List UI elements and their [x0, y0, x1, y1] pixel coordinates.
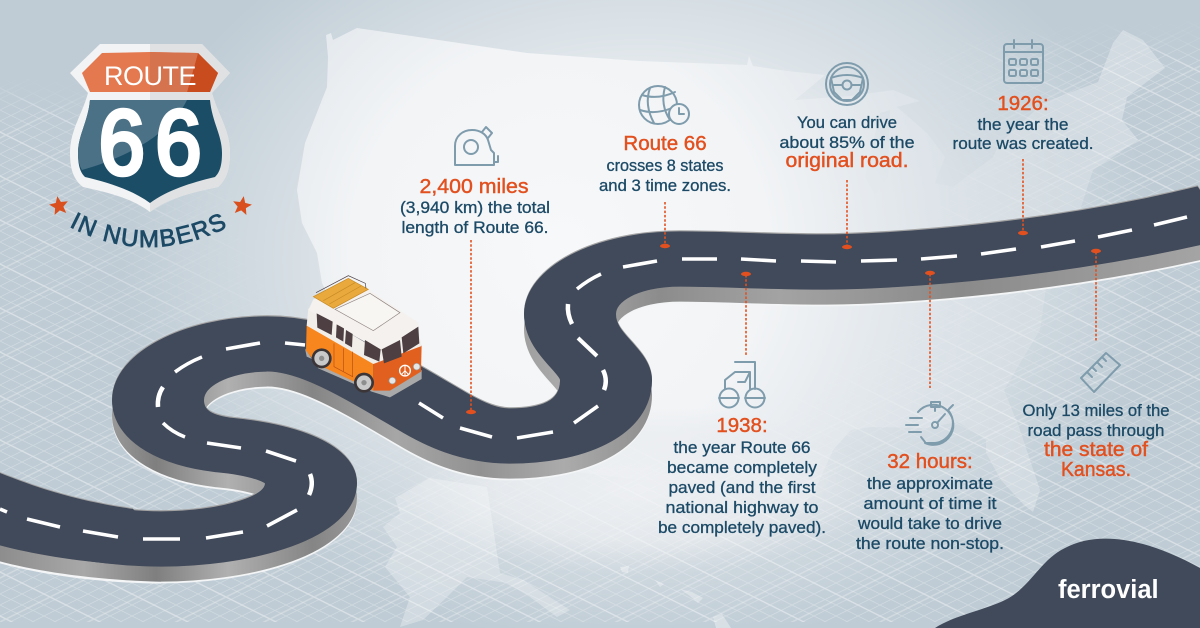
icon: steering wheel [826, 63, 868, 105]
callout: 1938: 1938: [716, 414, 768, 437]
callout: route 66 states: crosses 8 states [606, 157, 724, 175]
callout: 32 hours [856, 271, 1004, 553]
shield outer border [70, 44, 230, 212]
66 numerals: 66 [99, 91, 201, 194]
route 66 shield badge: IN NUMBERS [70, 212, 226, 248]
callout: 2,400 miles: (3,940 km) the total [400, 199, 550, 217]
icon: road roller [719, 362, 765, 408]
van side lower body [306, 325, 373, 391]
soft fade below the map [0, 390, 1200, 590]
van upper body [307, 308, 422, 364]
callout: kansas [1022, 249, 1170, 481]
callout: route 66 states [599, 86, 731, 248]
alaska [383, 478, 570, 627]
callout: kansas: Kansas. [1061, 458, 1131, 481]
callout: 2,400 miles: length of Route 66. [402, 219, 548, 237]
van roof [308, 289, 418, 349]
van windows [317, 313, 419, 363]
icon: calendar [1004, 40, 1043, 83]
shield blue body [78, 100, 222, 203]
hawaii [620, 566, 731, 628]
road [0, 211, 1200, 584]
route label: ROUTE [104, 61, 196, 91]
callout: 32 hours: amount of time it [864, 495, 997, 513]
footer logo blob [935, 539, 1200, 628]
callout: 32 hours: the route non-stop. [856, 535, 1004, 553]
icon: globe and clock [639, 86, 689, 124]
van roof rack [313, 278, 368, 308]
van door lines [334, 343, 353, 377]
marker line [660, 202, 670, 248]
callout: 2,400 miles: 2,400 miles [420, 175, 528, 198]
callout: 1938: became completely [667, 459, 818, 477]
callout: 32 hours: the approximate [867, 475, 993, 493]
marker line [925, 271, 935, 388]
callout: 1938: paved (and the first [668, 479, 816, 497]
callout: 85 percent: original road. [786, 149, 908, 172]
callout: 2,400 miles [400, 127, 550, 414]
marker line [741, 272, 751, 355]
callout: 85 percent: about 85% of the [780, 134, 914, 152]
van peace sign and lights [389, 363, 420, 384]
callout: kansas: road pass through [1028, 422, 1164, 440]
callout: route 66 states: and 3 time zones. [599, 177, 731, 195]
callout: 1938: the year Route 66 [674, 439, 810, 457]
ferrovial logo: ferrovial [1058, 576, 1159, 604]
marker line [1091, 249, 1101, 342]
van wheels [312, 348, 374, 393]
van bumper and chassis [305, 348, 422, 397]
icon: tape measure [455, 127, 498, 165]
callout: 85 percent: You can drive [797, 114, 897, 132]
callout: 32 hours: would take to drive [857, 515, 1002, 533]
icon: stopwatch [906, 402, 953, 445]
van front lower body [373, 345, 422, 391]
callout: 1926 [952, 40, 1094, 235]
callout: kansas: the state of [1044, 438, 1148, 461]
callout: 1926: route was created. [952, 135, 1094, 153]
marker line [842, 180, 852, 249]
icon: ruler [1081, 353, 1120, 392]
callout: route 66 states: Route 66 [623, 132, 707, 155]
callout: 1938: national highway to [666, 499, 818, 517]
stars [48, 195, 253, 216]
van [305, 276, 422, 397]
route 66 shield badge [49, 44, 252, 248]
marker line [1018, 159, 1028, 235]
callout: 1938: be completely paved). [658, 519, 826, 537]
callout: 32 hours: 32 hours: [887, 450, 973, 473]
shield orange header [82, 52, 218, 92]
van roof panel [335, 293, 400, 331]
callout: 1926: 1926: [997, 92, 1049, 115]
callout: 1938 [658, 272, 826, 537]
callout: kansas: Only 13 miles of the [1022, 402, 1170, 420]
in numbers arc text [70, 227, 228, 247]
callout: 1926: the year the [978, 116, 1068, 134]
road centre dashes [0, 217, 1187, 539]
marker line [466, 240, 476, 414]
callout: 85 percent [780, 63, 914, 249]
